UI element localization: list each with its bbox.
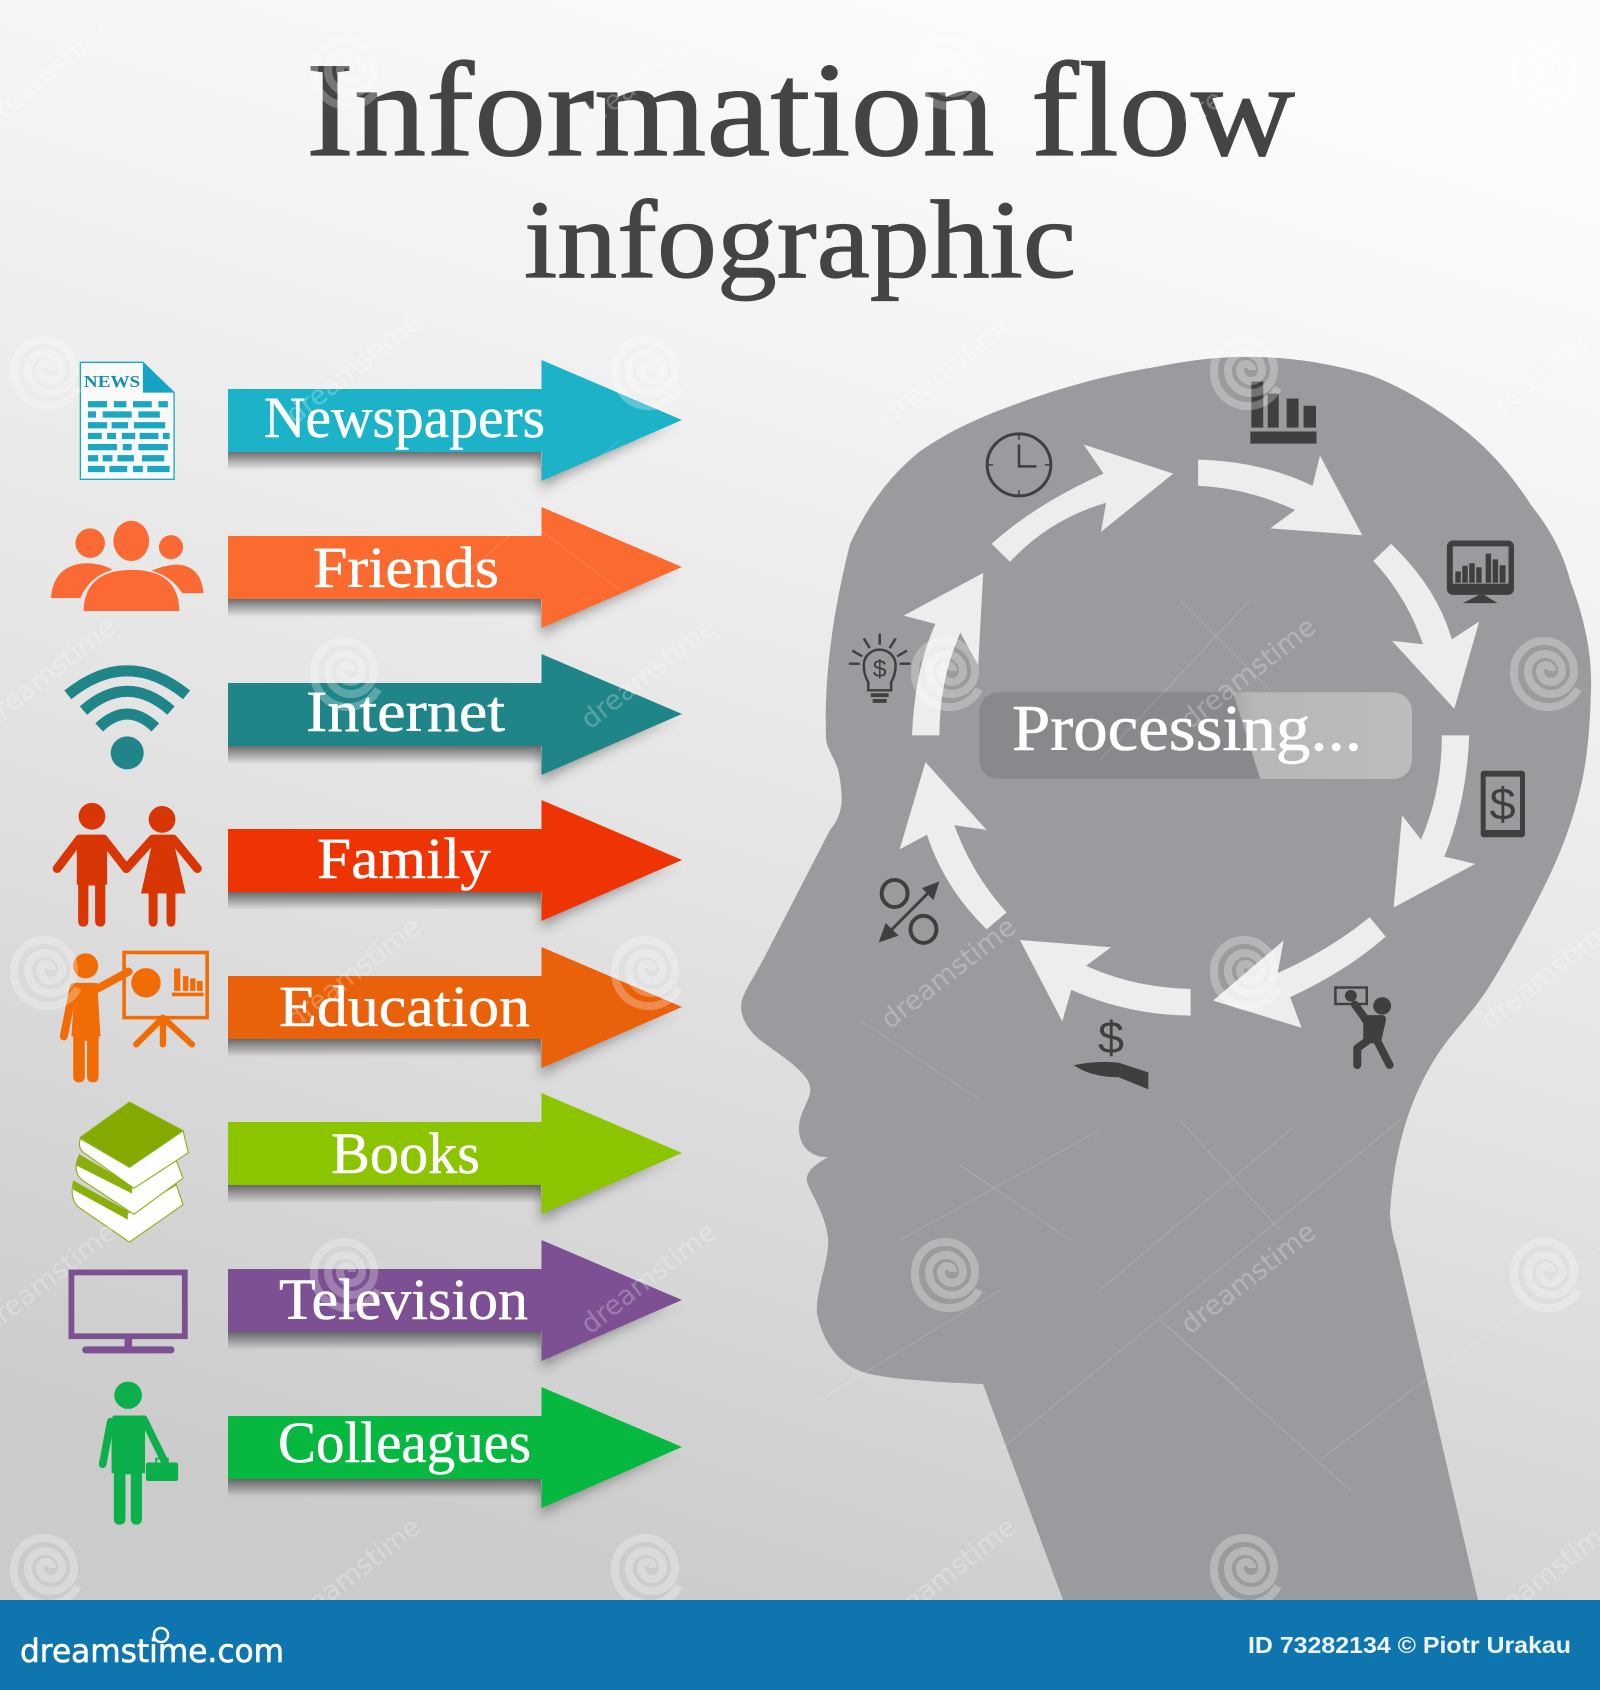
icon: percent arrows xyxy=(879,880,939,943)
arrow: colleagues: Colleagues xyxy=(278,1410,531,1475)
panel: processing cycle xyxy=(849,382,1525,1089)
icon: idea bulb: $ xyxy=(873,657,887,683)
watermark: dreamstime text: dreamstime xyxy=(875,306,1022,431)
icon: friends group xyxy=(51,521,204,611)
watermark: dreamstime text: dreamstime xyxy=(1175,11,1322,136)
icon: person with money xyxy=(1335,988,1391,1065)
icon: family couple xyxy=(57,803,197,927)
cycle arrows xyxy=(900,445,1479,1028)
arrow: television: Television xyxy=(279,1267,528,1332)
watermark: dreamstime text: dreamstime xyxy=(575,611,722,736)
panel: information sources arrows xyxy=(228,360,682,1516)
processing label: Processing... xyxy=(1012,692,1362,765)
arrow: internet xyxy=(228,654,682,783)
title: Information flow xyxy=(306,36,1295,185)
icon: colleague with briefcase xyxy=(103,1382,178,1525)
head silhouette xyxy=(741,357,1591,1600)
footer credit: ID 73282134 © Piotr Urakau xyxy=(1248,1632,1571,1658)
arrow: newspapers xyxy=(228,360,682,489)
icon: monitor chart xyxy=(1447,541,1514,603)
arrow: books xyxy=(228,1093,682,1222)
arrow: books: Books xyxy=(331,1121,480,1186)
icon: books xyxy=(72,1102,188,1242)
arrow: education: Education xyxy=(279,974,530,1039)
panel: source icons xyxy=(51,362,207,1082)
icon: newspaper: NEWS xyxy=(84,372,140,391)
arrow: education xyxy=(228,947,682,1076)
arrow: television xyxy=(228,1240,682,1369)
watermark: dreamstime text: dreamstime xyxy=(575,1216,722,1341)
icon: wifi xyxy=(68,671,187,769)
watermark: dreamstime text: dreamstime xyxy=(280,306,427,431)
icon: bar chart xyxy=(1250,382,1317,444)
footer logo: dreamstime.com xyxy=(20,1632,284,1670)
icon: clock xyxy=(987,434,1051,496)
title: infographic xyxy=(524,179,1076,302)
footer band xyxy=(0,1600,1600,1690)
watermark: dreamstime text: dreamstime xyxy=(875,911,1022,1036)
watermark: dreamstime text: dreamstime xyxy=(280,1511,427,1636)
title xyxy=(306,36,1295,302)
icon: idea bulb xyxy=(849,634,911,701)
arrow: friends: Friends xyxy=(313,535,499,600)
watermark: dreamstime text: dreamstime xyxy=(875,1511,1022,1636)
icon: education presenter xyxy=(64,952,207,1082)
arrow: friends xyxy=(228,507,682,636)
icon: newspaper xyxy=(80,362,174,479)
watermark: dreamstime text: dreamstime xyxy=(1175,1216,1322,1341)
arrow: family: Family xyxy=(317,826,491,891)
watermark: dreamstime text: dreamstime xyxy=(575,11,722,136)
icon: television xyxy=(71,1272,185,1353)
icon: hand with dollar: $ xyxy=(1098,1012,1124,1063)
icon: phone with dollar xyxy=(1481,771,1525,837)
processing pill background xyxy=(979,692,1412,779)
arrow: family xyxy=(228,800,682,929)
arrow: colleagues xyxy=(228,1387,682,1516)
icon: phone with dollar: $ xyxy=(1490,778,1516,829)
arrow: internet: Internet xyxy=(306,679,505,744)
arrow: newspapers: Newspapers xyxy=(264,385,545,450)
panel: source icons lower xyxy=(71,1102,188,1525)
watermark: dreamstime text: dreamstime xyxy=(1175,611,1322,736)
icon: hand with dollar xyxy=(1074,1012,1148,1089)
watermark: dreamstime text: dreamstime xyxy=(280,911,427,1036)
